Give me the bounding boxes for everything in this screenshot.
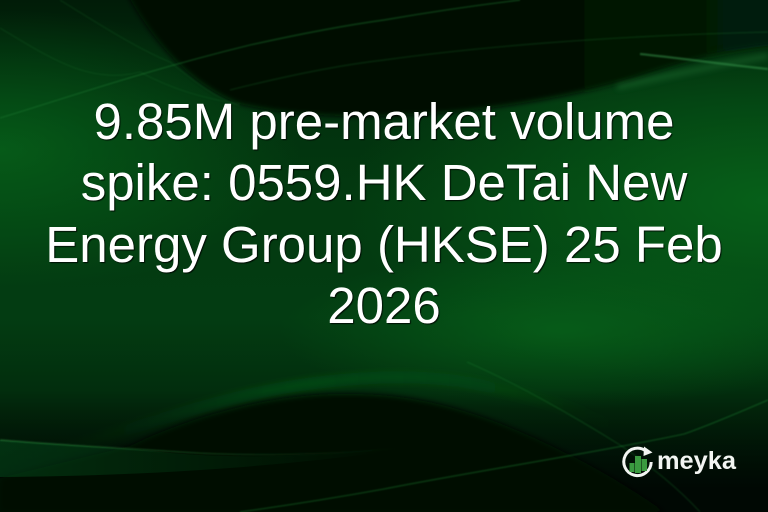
icon: circular arrow with bars: [624, 446, 652, 476]
title: 9.85M pre-market volume: [93, 93, 675, 150]
title: spike: 0559.HK DeTai New: [81, 154, 687, 211]
title: Energy Group (HKSE) 25 Feb: [45, 216, 723, 273]
title: 2026: [327, 277, 441, 334]
wordmark: meyka: [657, 447, 737, 475]
logo: meyka: [622, 446, 737, 478]
title: [45, 93, 723, 334]
